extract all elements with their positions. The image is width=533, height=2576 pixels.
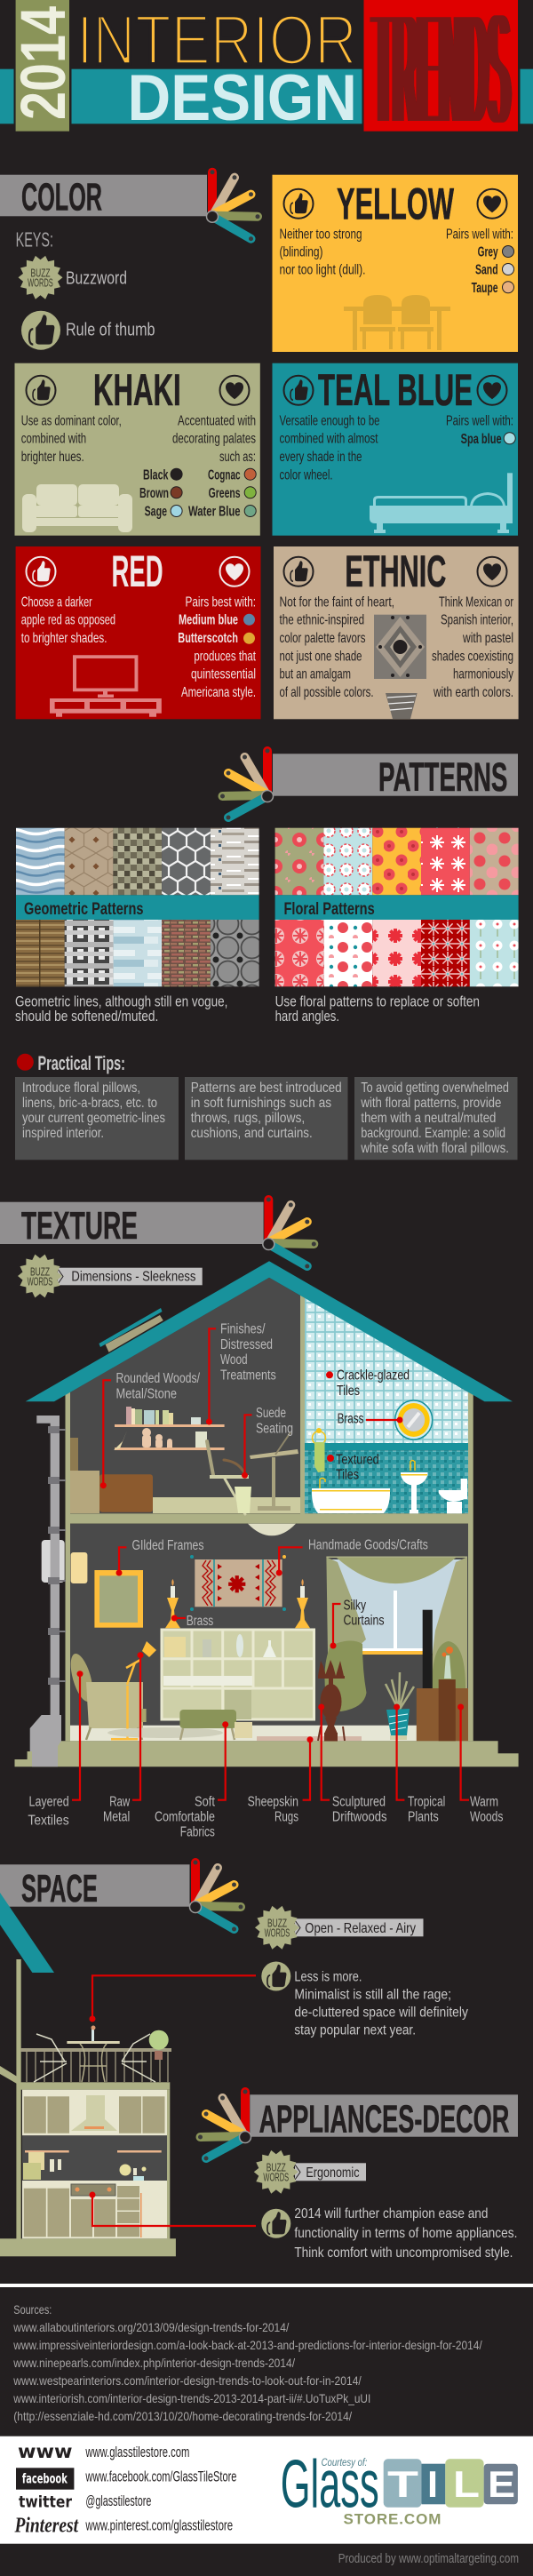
waste basket xyxy=(235,1487,251,1513)
tapestry xyxy=(190,1555,286,1611)
callout: brass candle: Brass xyxy=(187,1614,213,1629)
sources: www.westpearinteriors.com/interior-design-trends-to-look-out-for-in-2014/ xyxy=(12,2373,362,2388)
callout: soft fabrics: Comfortable xyxy=(155,1809,215,1824)
callout: gilded frames: GIlded Frames xyxy=(131,1538,204,1553)
social links: www.facebook.com/GlassTileStore xyxy=(85,2468,236,2484)
captions: patterns: hard angles. xyxy=(275,1008,339,1025)
callout: finishes: Distressed xyxy=(220,1337,273,1352)
panel: red: apple red as opposed xyxy=(21,613,115,628)
footer: white band xyxy=(0,2436,533,2544)
foundation xyxy=(14,1741,519,1767)
callout: layered textiles xyxy=(28,1671,83,1828)
callout: soft fabrics: Soft xyxy=(195,1794,215,1809)
structure xyxy=(0,1959,176,2256)
panel: khaki: combined with xyxy=(21,432,86,447)
panel: red: Pairs best with: xyxy=(185,594,256,610)
logo: glass tile store: E xyxy=(488,2463,515,2505)
social links: www.pinterest.com/glasstilestore xyxy=(85,2518,233,2534)
icon: buzzword badge: WORDS xyxy=(28,277,53,290)
callout: handmade goods: Handmade Goods/Crafts xyxy=(308,1537,428,1552)
callouts: texture xyxy=(28,1322,504,1839)
panel: khaki: Black xyxy=(143,467,169,483)
tip 1 xyxy=(15,1077,179,1160)
panel: ethnic: not just one shade xyxy=(279,649,362,664)
terrace table xyxy=(67,2026,120,2082)
practical tips: Practical Tips: xyxy=(37,1052,125,1074)
tip: ergonomic appliances: 2014 will further champion ease and xyxy=(294,2206,488,2221)
tip: ergonomic appliances xyxy=(89,2191,517,2261)
downstairs interior xyxy=(70,1524,468,1741)
panel: yellow: YELLOW xyxy=(337,179,454,229)
section heading: space xyxy=(0,1864,190,1910)
callout: tropical plants xyxy=(394,1704,445,1824)
panel: yellow: Grey xyxy=(478,244,498,259)
mirror xyxy=(395,1400,433,1440)
title: interior: INTERIOR xyxy=(76,0,357,79)
buzzwords: appliances: WORDS xyxy=(263,2172,289,2184)
panel: teal blue: every shade in the xyxy=(279,450,362,465)
panel: ethnic: but an amalgam xyxy=(279,667,351,682)
callout: soft fabrics: Fabrics xyxy=(180,1824,215,1839)
panel: teal blue: Spa blue xyxy=(461,432,502,447)
terrace plant xyxy=(149,2030,169,2060)
panel: yellow: nor too light (dull). xyxy=(279,262,366,277)
tip 2: throws, rugs, pillows, xyxy=(191,1111,305,1126)
panel: red: produces that xyxy=(194,649,256,664)
callout: sheepskin rugs: Rugs xyxy=(274,1809,298,1824)
social links: Pinterest xyxy=(14,2514,79,2537)
icon: swatch fan xyxy=(206,170,259,241)
panel: red: to brighter shades. xyxy=(21,631,107,646)
panel: teal blue: color wheel. xyxy=(279,467,332,483)
buzzwords: texture: WORDS xyxy=(28,1275,52,1288)
callout: textured tiles: Textured xyxy=(336,1452,379,1467)
callout: finishes: Treatments xyxy=(220,1368,276,1383)
panel: geometric patterns: Geometric Patterns xyxy=(24,900,144,919)
callout: raw metal: Raw xyxy=(109,1794,131,1809)
tip 2: Patterns are best introduced xyxy=(191,1081,342,1096)
callout: warm woods: Warm xyxy=(470,1794,498,1809)
social links: www xyxy=(18,2441,73,2462)
callout: sheepskin rugs: Sheepskin xyxy=(248,1794,298,1809)
callout: soft fabrics xyxy=(155,1721,228,1839)
callout: gilded frames xyxy=(115,1538,204,1576)
panel: yellow: Sand xyxy=(475,262,498,277)
tip 1: your current geometric-lines xyxy=(22,1111,165,1126)
panel: khaki: Use as dominant color, xyxy=(21,413,122,428)
skylight xyxy=(99,1308,163,1352)
panel: khaki: such as: xyxy=(219,450,256,465)
callout: sculptured driftwoods: Sculptured xyxy=(332,1794,386,1809)
ceiling lamp xyxy=(248,1524,296,1535)
callout: textured tiles xyxy=(327,1452,379,1482)
illustration: texture house xyxy=(14,1261,519,1767)
icon: swatch fan xyxy=(220,748,274,819)
panel: khaki: Cognac xyxy=(208,467,241,483)
panel: khaki: Water Blue xyxy=(188,505,241,520)
panel: khaki xyxy=(14,363,260,536)
panel: geometric patterns xyxy=(16,828,259,986)
buzzwords: texture xyxy=(18,1255,203,1297)
buzzwords: appliances: Ergonomic xyxy=(306,2165,359,2181)
upstairs interior xyxy=(70,1278,300,1513)
captions: patterns: Use floral patterns to replace or soften xyxy=(275,993,480,1009)
upper cabinets xyxy=(22,2090,167,2135)
practical tips xyxy=(15,1052,517,1160)
section heading: patterns xyxy=(273,754,518,800)
panel: ethnic: the ethnic-inspired xyxy=(279,613,364,628)
callout: raw metal: Metal xyxy=(103,1809,130,1824)
panel: red: quintessential xyxy=(191,667,256,682)
tip: less is more: de-cluttered space will definitely xyxy=(294,2005,468,2020)
panel: yellow: Neither too strong xyxy=(279,227,362,242)
section heading: texture xyxy=(0,1202,264,1248)
roof xyxy=(26,1261,513,1401)
social links xyxy=(14,2441,236,2537)
kitchen back wall xyxy=(22,2135,167,2181)
bathroom fixtures xyxy=(312,1428,467,1513)
bathroom tiles xyxy=(305,1297,468,1443)
panel: yellow xyxy=(272,175,518,352)
panel: khaki: brighter hues. xyxy=(21,450,84,465)
title: design: DESIGN xyxy=(128,62,357,134)
walls and slabs xyxy=(66,1288,473,1741)
callout: brass mirror xyxy=(338,1412,403,1427)
sources: www.allaboutinteriors.org/2013/09/design-trends-for-2014/ xyxy=(12,2320,289,2334)
callout: textured tiles: Tiles xyxy=(336,1467,359,1482)
callout: raw metal xyxy=(103,1652,144,1824)
icon: ethnic rug xyxy=(374,615,426,679)
icon: swatch fan xyxy=(190,1861,243,1932)
illustration: kitchen and terrace xyxy=(0,1959,176,2256)
callout: suede seating: Seating xyxy=(256,1421,293,1436)
social links: twitter xyxy=(19,2493,72,2512)
wood cabinet with vase xyxy=(417,1610,468,1741)
panel: khaki: Sage xyxy=(145,505,167,520)
terrace railing xyxy=(20,2048,171,2082)
driftwood sculpture xyxy=(318,1660,345,1742)
callout: suede seating xyxy=(242,1406,293,1479)
divider xyxy=(0,2284,533,2287)
icon: chairs xyxy=(344,295,450,350)
drafting table xyxy=(250,1432,298,1511)
panel: teal blue: combined with almost xyxy=(279,432,378,447)
icon: bed xyxy=(370,473,513,533)
tip: less is more: Less is more. xyxy=(294,1969,362,1984)
callout: silky curtains: Silky xyxy=(343,1599,366,1614)
window with curtains xyxy=(326,1557,467,1688)
panel: khaki: KHAKI xyxy=(93,365,181,415)
keys legend: KEYS: xyxy=(16,227,53,251)
callout: silky curtains xyxy=(330,1599,385,1649)
tip 2: cushions, and curtains. xyxy=(191,1126,313,1141)
callout: suede seating: Suede xyxy=(256,1406,286,1421)
section heading: space: SPACE xyxy=(21,1867,98,1910)
sources: www.interiorish.com/interior-design-trends-2013-2014-part-ii/#.UoTuxPk_uUI xyxy=(12,2391,370,2405)
buzzwords: space: BUZZ xyxy=(267,1918,287,1930)
lower cabinets xyxy=(22,2181,167,2238)
tip 3: with floral patterns, provide xyxy=(361,1096,501,1111)
callout: sculptured driftwoods xyxy=(318,1704,387,1824)
tip: less is more: stay popular next year. xyxy=(294,2022,416,2038)
icon: swatch fan xyxy=(263,1198,316,1269)
callout: crackle-glazed tiles: Crackle-glazed xyxy=(337,1368,410,1384)
panel: red: RED xyxy=(112,546,163,596)
callout: finishes xyxy=(206,1322,276,1425)
social links: @glasstilestore xyxy=(85,2493,151,2509)
section heading: color xyxy=(0,175,207,219)
callout: warm woods xyxy=(457,1704,504,1824)
tip 2 xyxy=(185,1077,348,1160)
floor lamp xyxy=(107,1641,223,1740)
buzzwords: texture: Dimensions - Sleekness xyxy=(71,1270,195,1285)
logo: glass tile store: Glass xyxy=(281,2447,379,2523)
panel: red: Medium blue xyxy=(179,613,238,628)
logo: glass tile store: Courtesy of: xyxy=(322,2456,367,2468)
buzzwords: appliances: BUZZ xyxy=(266,2162,286,2174)
tip 3: them with a neutral/muted xyxy=(361,1111,496,1126)
callout: sculptured driftwoods: Driftwoods xyxy=(332,1809,387,1824)
desk chair xyxy=(207,1441,249,1514)
captions: patterns: should be softened/muted. xyxy=(15,1008,158,1025)
sources: (http://essenziale-hd.com/2013/10/20/home-decorating-trends-for-2014/ xyxy=(13,2409,352,2423)
buzzwords: space: WORDS xyxy=(265,1927,290,1940)
header xyxy=(0,0,533,164)
tip: less is more xyxy=(89,1962,468,2038)
section heading: color: COLOR xyxy=(21,176,102,219)
drain pipe xyxy=(30,1416,66,1767)
sources xyxy=(12,2302,482,2423)
panel: ethnic xyxy=(274,546,519,719)
logo: glass tile store: T xyxy=(387,2463,418,2505)
icon: sofa xyxy=(22,484,132,532)
buzzwords: space xyxy=(255,1906,423,1950)
panel: yellow: (blinding) xyxy=(279,244,323,259)
callout: layered textiles: Layered xyxy=(28,1794,69,1809)
icon: tv console xyxy=(50,655,162,717)
callout: warm woods: Woods xyxy=(470,1809,504,1824)
icon: swatch fan xyxy=(198,2090,251,2161)
panel: red: Butterscotch xyxy=(178,631,238,646)
callout: handmade goods xyxy=(276,1537,428,1576)
captions: patterns: Geometric lines, although still en vogue, xyxy=(15,993,227,1009)
sheepskin rug xyxy=(257,1736,362,1741)
shelves xyxy=(114,1407,225,1450)
tip 1: linens, bric-a-bracs, etc. to xyxy=(22,1096,157,1111)
sources: Sources: xyxy=(13,2302,52,2317)
callout: sheepskin rugs xyxy=(248,1736,313,1824)
panel: red xyxy=(16,546,260,719)
panel: red: Choose a darker xyxy=(21,594,92,610)
sources: www.ninepearls.com/index.php/interior-design-trends-2014/ xyxy=(12,2356,295,2370)
panel: teal blue xyxy=(272,363,518,536)
green chair xyxy=(324,1640,366,1711)
logo: glass tile store: L xyxy=(453,2463,480,2505)
tip 2: in soft furnishings such as xyxy=(191,1096,331,1111)
callout: brass candle xyxy=(171,1614,213,1629)
section heading: texture: TEXTURE xyxy=(21,1204,138,1248)
buzzwords: appliances xyxy=(254,2150,366,2194)
callout: crackle-glazed tiles xyxy=(326,1368,410,1399)
panel: ethnic: color palette favors xyxy=(279,631,366,646)
callout: brass mirror: Brass xyxy=(338,1412,364,1427)
tip 1: inspired interior. xyxy=(22,1126,104,1141)
bookcase xyxy=(161,1629,315,1720)
panel: khaki: Accentuated with xyxy=(178,413,256,428)
picture frame xyxy=(94,1570,143,1628)
tip 1: Introduce floral pillows, xyxy=(22,1081,140,1096)
sofa xyxy=(70,1438,300,1513)
terrace chairs xyxy=(34,2034,155,2082)
icon: ethnic vase xyxy=(386,693,418,719)
armchair xyxy=(67,1651,147,1740)
tip 3 xyxy=(354,1077,517,1160)
potted plant xyxy=(386,1672,414,1740)
callout: rounded woods: Rounded Woods/ xyxy=(115,1371,201,1386)
social links: facebook xyxy=(22,2470,68,2486)
panel: ethnic: with pastel xyxy=(462,631,513,646)
panel: yellow: Taupe xyxy=(472,281,498,296)
callout: rounded woods: Metal/Stone xyxy=(115,1386,177,1401)
icon: buzzword badge xyxy=(18,256,62,299)
wall sconce xyxy=(71,1552,87,1583)
callout: crackle-glazed tiles: Tiles xyxy=(337,1384,360,1399)
panel: floral patterns: Floral Patterns xyxy=(284,900,375,919)
panel: ethnic: Not for the faint of heart, xyxy=(279,594,394,610)
social links: www.glasstilestore.com xyxy=(85,2444,189,2460)
callout: layered textiles: Textiles xyxy=(28,1813,69,1828)
panel: floral patterns xyxy=(275,828,519,986)
panel: teal blue: Versatile enough to be xyxy=(279,413,380,428)
candle holders xyxy=(165,1579,310,1628)
logo: glass tile store: STORE.COM xyxy=(343,2511,441,2528)
ottoman xyxy=(179,1710,252,1740)
panel: ethnic: of all possible colors. xyxy=(279,685,373,700)
keys legend xyxy=(16,227,155,350)
callout: tropical plants: Plants xyxy=(408,1809,439,1824)
callout: silky curtains: Curtains xyxy=(343,1613,385,1628)
panel: red: Americana style. xyxy=(181,685,256,700)
icon: rule of thumb xyxy=(21,311,60,350)
callout: rounded woods xyxy=(100,1371,201,1488)
roof stub xyxy=(0,1893,54,1973)
keys legend: Buzzword xyxy=(66,268,127,288)
logo: glass tile store: I xyxy=(427,2463,438,2505)
panel: khaki: Brown xyxy=(139,486,169,501)
panel: ethnic: ETHNIC xyxy=(345,546,446,596)
panel: khaki: decorating palates xyxy=(172,432,256,447)
buzzwords: space: Open - Relaxed - Airy xyxy=(305,1921,416,1936)
tip: less is more: Minimalist is still all the rage; xyxy=(294,1987,451,2002)
callout: tropical plants: Tropical xyxy=(408,1794,445,1809)
keys legend: Rule of thumb xyxy=(66,320,155,339)
callout: finishes: Finishes/ xyxy=(220,1322,266,1337)
buzzwords: texture: BUZZ xyxy=(30,1265,50,1278)
panel: khaki: Greens xyxy=(209,486,241,501)
callout: finishes: Wood xyxy=(220,1352,248,1368)
captions: patterns xyxy=(15,993,480,1025)
logo: glass tile store xyxy=(281,2447,518,2528)
icon: buzzword badge: BUZZ xyxy=(30,267,51,280)
